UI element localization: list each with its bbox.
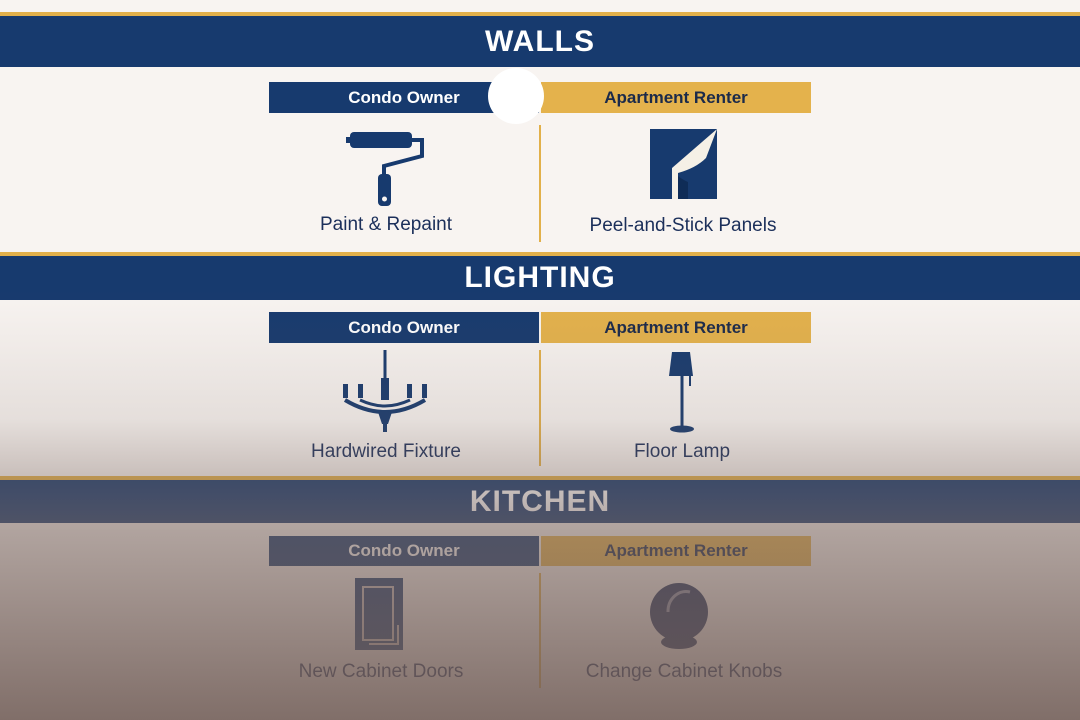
lighting apartment renter header: Apartment Renter [604, 318, 748, 337]
kitchen apartment renter header: Apartment Renter [604, 541, 748, 560]
kitchen condo owner header [269, 536, 539, 566]
label: new cabinet doors: New Cabinet Doors [299, 661, 463, 682]
lighting apartment renter header [541, 312, 811, 343]
icon: cabinet knob [650, 583, 708, 649]
kitchen condo owner header: Condo Owner [348, 541, 460, 560]
icon: chandelier [343, 350, 427, 432]
heading: kitchen: KITCHEN [470, 485, 610, 518]
walls top line [0, 12, 1080, 16]
lighting top line [0, 252, 1080, 256]
walls condo owner header: Condo Owner [348, 88, 460, 107]
walls apartment renter header: Apartment Renter [604, 88, 748, 107]
label: change cabinet knobs: Change Cabinet Knobs [586, 661, 782, 682]
heading: lighting: LIGHTING [464, 261, 616, 294]
kitchen apartment renter header [541, 536, 811, 566]
label: paint & repaint: Paint & Repaint [320, 214, 452, 235]
heading: lighting [0, 256, 1080, 300]
kitchen top line [0, 476, 1080, 480]
heading: walls: WALLS [485, 25, 595, 58]
label: floor lamp: Floor Lamp [634, 441, 730, 462]
lighting condo owner header: Condo Owner [348, 318, 460, 337]
icon: cabinet door [355, 578, 403, 650]
lighting condo owner header [269, 312, 539, 343]
walls apartment renter header [541, 82, 811, 113]
icon: paint roller [346, 132, 424, 206]
walls condo owner header [269, 82, 539, 113]
logo watermark [488, 68, 544, 124]
label: peel-and-stick panels: Peel-and-Stick Panels [590, 215, 776, 236]
label: hardwired fixture: Hardwired Fixture [311, 441, 461, 462]
heading: walls [0, 16, 1080, 67]
icon: floor lamp [669, 352, 694, 432]
heading: kitchen [0, 480, 1080, 523]
icon: peel and stick panel [650, 129, 717, 199]
